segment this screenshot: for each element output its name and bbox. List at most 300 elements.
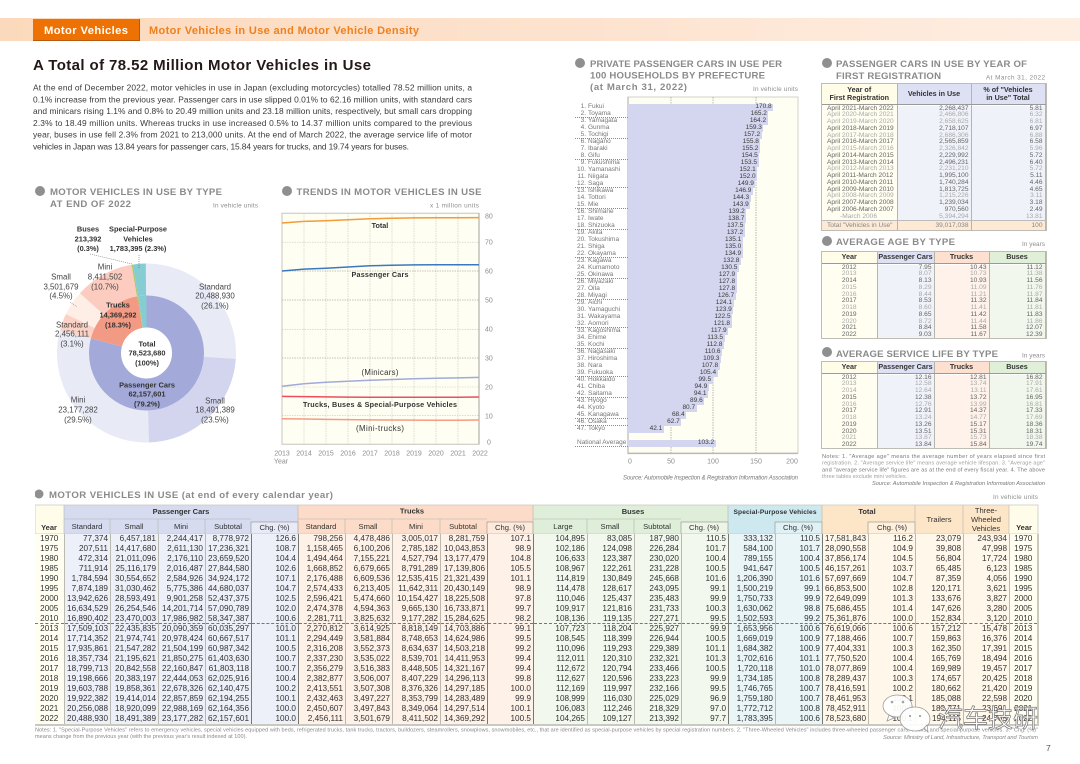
bar chart: prefectures: 127.9 (719, 271, 735, 278)
table: first registration: April 2010-March 2011 (827, 179, 893, 186)
bar chart: prefectures: 24. (577, 264, 586, 271)
table: average service life: 2020 (842, 428, 857, 435)
table body: yearly data: 19,858,361 (115, 684, 156, 693)
table body: yearly data: 226,944 (649, 634, 679, 643)
bar chart: prefectures: 45. (577, 411, 586, 418)
heading: first registration: PASSENGER CARS IN USE BY YEAR OF (836, 59, 1027, 70)
table body: yearly data: 6,123 (986, 564, 1007, 573)
panel: average age by type (821, 236, 1047, 339)
line chart (274, 213, 493, 466)
table: average age: 2015 (842, 284, 857, 291)
table body: yearly data: 2022 (40, 714, 58, 723)
table body: yearly data: 213,392 (649, 714, 679, 723)
table body: yearly data: 57,090,789 (208, 604, 249, 613)
table body: yearly data: 83,085 (607, 534, 632, 543)
table body: yearly data: 100.3 (892, 644, 913, 653)
intro paragraph: 0.1% increase from the previous year. Passenger cars in use slipped 0.01% to 62.16 million units, with standard cars (33, 94, 472, 104)
table body: yearly data: 60,987,342 (208, 644, 249, 653)
table body: yearly data: 99.2 (515, 644, 531, 653)
bar chart: prefectures: Ehime (588, 334, 606, 341)
table body: yearly data: 2019 (40, 684, 58, 693)
table body: yearly data: 14,201,714 (162, 604, 203, 613)
table body: yearly data: 3,827 (986, 594, 1007, 603)
bar chart: prefectures: Osaka (588, 418, 607, 425)
table body: yearly data: 128,617 (602, 584, 632, 593)
table body: yearly data: 98.9 (515, 584, 531, 593)
table header: Buses (622, 507, 644, 516)
table body: yearly data: 2010 (40, 614, 58, 623)
table body: yearly data: 14,283,489 (444, 694, 485, 703)
table: average service life: 12.16 (915, 374, 932, 381)
unit note: In years (1022, 352, 1045, 360)
x axis: 2020 (428, 450, 444, 458)
table body: yearly data: 2018 (1014, 674, 1032, 683)
notes: and "average service life" figures are as at the end of every fiscal year. 4. The above (822, 468, 1045, 474)
bar chart: prefectures: 34. (577, 334, 586, 341)
bar chart: prefectures: 28. (577, 292, 586, 299)
table body: yearly data: 235,483 (649, 594, 679, 603)
table: average service life: Trucks (950, 362, 973, 371)
table body: yearly data: 116,030 (603, 694, 632, 703)
heading: first registration (822, 58, 1027, 82)
x axis (628, 458, 798, 466)
table body: yearly data: 110,096 (556, 644, 585, 653)
table body: yearly data: 2016 (1014, 654, 1032, 663)
table body: yearly data: 14,297,514 (444, 704, 485, 713)
donut labels: (26.1%) (201, 302, 229, 310)
table: first registration: April 2008-March 2009 (827, 192, 894, 199)
panel: private passenger cars per 100 households (575, 58, 799, 482)
table body: yearly data: 100.5 (706, 564, 726, 573)
table body: yearly data: 20,978,424 (162, 634, 203, 643)
table: average age: Passenger Cars (878, 252, 933, 261)
donut labels: (10.7%) (91, 282, 119, 292)
table body: yearly data: 19,603,788 (67, 684, 108, 693)
table body: yearly data: 100.7 (800, 694, 820, 703)
table: average age: 11.32 (970, 297, 986, 304)
table body: yearly data: 102.0 (276, 604, 296, 613)
table header: Subtotal (214, 522, 242, 531)
donut labels: Standard (199, 282, 231, 292)
donut labels: Mini (98, 262, 112, 272)
table body: yearly data: 8,411,502 (402, 714, 438, 723)
table body: yearly data: 2000 (40, 594, 58, 603)
bar chart: prefectures: 149.9 (738, 180, 754, 187)
table header: Subtotal (643, 522, 671, 531)
bar chart: prefectures: Fukuoka (588, 369, 613, 376)
table: first registration: 6.40 (1030, 159, 1042, 166)
bar chart: prefectures: Shiga (588, 243, 605, 250)
table body: yearly data: 2,574,433 (307, 584, 343, 593)
x axis: 0 (628, 458, 632, 466)
series labels: Passenger Cars (352, 270, 408, 279)
table body: yearly data: 1,494,464 (307, 554, 343, 563)
bar chart: prefectures: Hyogo (588, 397, 607, 404)
table header: Standard (306, 522, 336, 531)
table body: yearly data: 207,511 (79, 544, 108, 553)
table body: yearly data: 99.9 (515, 694, 531, 703)
table body: yearly data: 2021 (1014, 704, 1032, 713)
bar chart: prefectures: 113.5 (707, 334, 723, 341)
table body: yearly data: 34,924,172 (208, 574, 249, 583)
x axis: 50 (667, 458, 675, 466)
table: first registration: 6.81 (1030, 118, 1042, 125)
bar chart: prefectures: 152.0 (739, 173, 756, 180)
table: average age: 2021 (842, 324, 857, 331)
table body: yearly data: 7,874,189 (72, 584, 108, 593)
table body: yearly data: 1995 (40, 584, 58, 593)
bar chart: prefectures: Kagawa (588, 257, 612, 264)
table: average age: Buses (1006, 252, 1028, 261)
table: average age: 10.93 (970, 277, 986, 284)
table body: yearly data: 16,890,402 (67, 614, 108, 623)
bar chart: prefectures: 138.7 (728, 215, 744, 222)
panel: passenger cars by year of first registration (821, 58, 1047, 231)
x axis: 2015 (318, 450, 334, 458)
table body: yearly data: 100.0 (276, 714, 296, 723)
series: total (282, 218, 479, 223)
table: average age: 11.84 (1026, 297, 1042, 304)
table body: yearly data: 1,772,712 (737, 704, 773, 713)
bar chart: prefectures: 43. (577, 397, 586, 404)
table: first registration (821, 83, 1047, 231)
table body: yearly data: 112,672 (556, 664, 585, 673)
table body: yearly data: 22,678,326 (162, 684, 203, 693)
table header: Total (858, 507, 876, 516)
table body: yearly data: 100.2 (892, 684, 913, 693)
table: average age: 2022 (842, 331, 857, 338)
table: average age: 8.65 (919, 311, 932, 318)
heading: per 100 households: PRIVATE PASSENGER CARS IN USE PER (590, 59, 782, 70)
table: average service life: 2021 (842, 434, 857, 441)
table body: yearly data: 2022 (1014, 714, 1032, 723)
table body: yearly data: 243,934 (977, 534, 1007, 543)
x axis: 2017 (362, 450, 378, 458)
table: average service life: Buses (1006, 362, 1028, 371)
table: first registration: April 2013-March 2014 (827, 159, 894, 166)
heading: service life: AVERAGE SERVICE LIFE BY TYPE (836, 349, 999, 360)
bar chart: prefectures: 6. (581, 138, 586, 145)
table: average service life: 2012 (842, 374, 857, 381)
table body: yearly data: 98.8 (804, 604, 820, 613)
bar chart: prefectures: 21. (577, 243, 586, 250)
table body: yearly data: 75,686,455 (825, 604, 866, 613)
table body: yearly data: 17,581,843 (825, 534, 866, 543)
table body: yearly data: 99.9 (804, 594, 820, 603)
table: first registration: 2,718,107 (939, 125, 968, 132)
table: first registration: April 2015-March 2016 (827, 145, 894, 152)
inner ring (105, 312, 188, 394)
table body: yearly data: 225,927 (649, 624, 679, 633)
donut labels: 18,491,389 (195, 406, 235, 414)
table header: Subtotal (449, 522, 477, 531)
series: trucks, buses and special-purpose (282, 395, 479, 398)
bar chart: prefectures: 47. (577, 425, 586, 432)
bar chart: prefectures: Kanagawa (588, 411, 619, 418)
table body: yearly data: 101.3 (892, 594, 913, 603)
table: average service life: 13.72 (970, 394, 986, 401)
table: average service life: 13.84 (915, 441, 932, 448)
table: average age: 11.86 (1026, 318, 1042, 325)
heading: trends: TRENDS IN MOTOR VEHICLES IN USE (296, 187, 482, 198)
table body: yearly data: 100.7 (276, 654, 296, 663)
table body: yearly data: 77,404,331 (825, 644, 866, 653)
table body: yearly data: 1,158,465 (307, 544, 343, 553)
table header: Chg. (%) (783, 523, 813, 532)
table body: yearly data: 25,116,179 (116, 564, 156, 573)
table header: Chg. (%) (877, 523, 907, 532)
series labels (303, 221, 457, 433)
bar chart: prefectures: Gunma (588, 124, 609, 131)
series labels: Total (372, 221, 388, 230)
bar chart: prefectures: 10. (577, 166, 586, 173)
table body: yearly data: 126.6 (276, 534, 296, 543)
y axis: 30 (485, 356, 493, 362)
table body: yearly data: 108,999 (555, 694, 585, 703)
table body: yearly data: 28,593,491 (115, 594, 156, 603)
table body: yearly data: 11,642,311 (398, 584, 438, 593)
table body: yearly data: 104.5 (892, 554, 913, 563)
table body: yearly data: 22,435,835 (115, 624, 156, 633)
bar chart: prefectures: 27. (577, 285, 586, 292)
unit note: In vehicle units (753, 86, 798, 93)
table: average service life: 17.91 (1026, 380, 1042, 387)
table: average age: 2018 (842, 304, 857, 311)
table body: yearly data: 14,417,680 (115, 544, 156, 553)
table body: yearly data: 2,270,812 (307, 624, 343, 633)
table: average age: 11.12 (1026, 264, 1042, 271)
bar chart: prefectures: 16. (577, 208, 586, 215)
table: first registration: April 2021-March 2022 (827, 105, 894, 112)
bar chart: prefectures: 12. (577, 180, 586, 187)
table body: yearly data: 78,289,437 (825, 674, 866, 683)
table body: yearly data: 5,775,386 (167, 584, 203, 593)
table header: Special-Purpose Vehicles (734, 509, 817, 516)
unit note: In vehicle units (993, 494, 1038, 501)
bar chart: prefectures: 15. (577, 201, 586, 208)
table body: yearly data: 6,457,181 (120, 534, 156, 543)
intro paragraph: 2.3% to 18.49 million units. Whereas trucks in use increased 0.5% to 14.37 million units compared to the previous (33, 118, 472, 128)
bar chart: prefectures: 154.5 (742, 152, 758, 159)
notes: three tables exclude mini vehicles. (822, 474, 908, 480)
bar chart: prefectures: Kyoto (588, 404, 605, 411)
table body: yearly data: 941,647 (743, 564, 773, 573)
table: average service life: 13.99 (970, 401, 986, 408)
watermark (882, 694, 1038, 733)
bar chart: prefectures: 13. (577, 187, 586, 194)
bar chart: prefectures: 105.4 (700, 369, 716, 376)
table body: yearly data: 20,256,088 (67, 704, 108, 713)
bar chart: prefectures: 38. (577, 362, 586, 369)
table header: Year (41, 523, 57, 532)
table body: yearly data: 333,132 (743, 534, 773, 543)
table body: yearly data: 1985 (1014, 564, 1032, 573)
table body: yearly data: 2,456,111 (308, 714, 343, 723)
table body: yearly data: 1,750,733 (737, 594, 773, 603)
table body: yearly data: 1,653,956 (737, 624, 773, 633)
bar chart: prefectures: Shimane (588, 208, 614, 215)
table header: Mini (174, 522, 188, 531)
table body: yearly data: 2005 (40, 604, 58, 613)
table body: yearly data: 106,083 (555, 704, 585, 713)
table body: yearly data: 7,155,221 (354, 554, 390, 563)
table body: yearly data: 18,225,508 (444, 594, 485, 603)
table body: yearly data: 62,025,916 (208, 674, 249, 683)
table body: yearly data: 21,974,741 (115, 634, 156, 643)
table: average age: 11.76 (1026, 284, 1042, 291)
bar chart: prefectures: 17. (577, 215, 586, 222)
table body: yearly data: 2,432,463 (307, 694, 343, 703)
table body: yearly data: 1975 (40, 544, 58, 553)
table body: yearly data: 2,382,877 (307, 674, 343, 683)
table body: yearly data: 4,594,363 (354, 604, 390, 613)
bar chart: prefectures: 122.5 (714, 313, 731, 320)
icon: chat bubbles (883, 695, 930, 732)
table body: yearly data: 100.2 (276, 684, 296, 693)
table body: yearly data: 26,254,546 (115, 604, 156, 613)
bar chart: prefectures: 31. (577, 313, 586, 320)
table body: yearly data: 2,294,449 (307, 634, 343, 643)
y axis: 20 (485, 384, 493, 392)
donut labels: 20,488,930 (195, 292, 235, 300)
table body: yearly data: 110,046 (556, 594, 585, 603)
heading: by type: AT END OF 2022 (50, 199, 131, 210)
table body: yearly data: 21,504,199 (162, 644, 203, 653)
unit note: In years (1022, 241, 1045, 248)
table body: yearly data: 119,997 (603, 684, 632, 693)
table body: yearly data: 147,626 (931, 604, 961, 613)
table body: yearly data: 100.4 (706, 554, 726, 563)
table body: yearly data: 101.6 (706, 574, 726, 583)
y axis: 50 (485, 298, 493, 304)
table: average service life: Year (842, 362, 857, 371)
table body: yearly data: 189,771 (931, 704, 961, 713)
bar chart: prefectures: 41. (577, 383, 586, 390)
x axis: 2018 (384, 450, 400, 458)
table body: yearly data: 1,720,118 (737, 664, 773, 673)
bar chart: prefectures: 89.6 (690, 397, 703, 404)
bar chart: prefectures: 39. (577, 369, 586, 376)
x axis: 2019 (406, 450, 422, 458)
notes (35, 728, 1038, 740)
bar chart: prefectures: 25. (577, 271, 586, 278)
donut labels: Vehicles (123, 234, 153, 244)
table body: yearly data: 22,857,859 (162, 694, 203, 703)
outer ring (73, 280, 220, 426)
donut labels (43, 224, 235, 424)
bar plot background (628, 97, 798, 454)
table body: yearly data: 17,724 (982, 554, 1007, 563)
table: first registration: 970,560 (945, 206, 968, 213)
table body: yearly data: 798,256 (313, 534, 343, 543)
table body: yearly data: 101.7 (800, 544, 820, 553)
table body: yearly data: 230,020 (649, 554, 679, 563)
table: first registration: 5.72 (1030, 165, 1042, 172)
table body: yearly data: 20,842,558 (115, 664, 156, 673)
series labels: (Mini-trucks) (356, 424, 404, 433)
table: first registration: 2,268,437 (939, 105, 968, 112)
table: average service life: 15.73 (970, 434, 986, 441)
bar chart: prefectures: 132.8 (723, 257, 739, 264)
section title: Motor Vehicles in Use and Motor Vehicle Density (149, 25, 420, 37)
table: average service life: 13.87 (915, 434, 932, 441)
table body: yearly data: 789,155 (743, 554, 773, 563)
table body: yearly data: 13,942,626 (67, 594, 108, 603)
table: first registration: 13.81 (1026, 213, 1042, 220)
heading: by type: MOTOR VEHICLES IN USE BY TYPE (50, 187, 223, 198)
table body: yearly data: 180,662 (931, 684, 961, 693)
table header: Small (600, 522, 620, 531)
main heading: A Total of 78.52 Million Motor Vehicles in Use (33, 57, 371, 74)
table body: yearly data: 3,552,373 (354, 644, 390, 653)
section tab: Motor Vehicles (44, 25, 128, 37)
table: first registration: 4.65 (1030, 186, 1042, 193)
table body: yearly data: 39,808 (936, 544, 961, 553)
table body: yearly data: 233,223 (649, 674, 679, 683)
bar chart: prefectures: 1. (581, 103, 586, 110)
x axis: 200 (786, 458, 798, 466)
table body: yearly data: 112,169 (556, 684, 585, 693)
table body: yearly data: 3,280 (986, 604, 1007, 613)
table: average age: 2012 (842, 264, 857, 271)
table body: yearly data: 61,403,630 (208, 654, 249, 663)
intro paragraph (33, 82, 472, 151)
bar chart: prefectures: 124.1 (716, 299, 732, 306)
intro paragraph: and minicars rising 1.1% and 0.8% to 20.49 million units and 23.18 million units, respectively, but small cars dropping (33, 106, 472, 116)
source: Source: Ministry of Land, Infrastructure, Transport and Tourism (883, 735, 1038, 741)
table: average age: Trucks (950, 252, 973, 261)
table: average age: 11.87 (1026, 291, 1042, 298)
table: first registration: 6.97 (1030, 125, 1042, 132)
bar chart: prefectures: 20. (577, 236, 586, 243)
bar chart: prefectures: Kochi (588, 341, 604, 348)
table header: Wheeled (971, 515, 1001, 524)
table body: yearly data: 100.6 (800, 714, 820, 723)
table body: yearly data: 1980 (1014, 554, 1032, 563)
table: average service life: 2017 (842, 407, 857, 414)
table body: yearly data: 100.6 (892, 624, 913, 633)
table body: yearly data: 101.1 (800, 654, 820, 663)
table body: yearly data: 124,098 (602, 544, 632, 553)
table body: yearly data: 711,914 (79, 564, 108, 573)
table body: yearly data: 233,466 (649, 664, 679, 673)
table body: yearly data: 120,794 (602, 664, 632, 673)
bar chart: prefectures: 137.5 (727, 222, 743, 229)
table body: yearly data: 62,164,356 (208, 704, 249, 713)
table: average age (821, 251, 1047, 339)
table: average age: 2013 (842, 270, 857, 277)
table body: yearly data: 2005 (1014, 604, 1032, 613)
notes (822, 454, 1045, 487)
table header: Small (358, 522, 378, 531)
bar chart: prefectures: 146.9 (735, 187, 751, 194)
table: average service life: 12.91 (915, 407, 932, 414)
table: average service life: 12.64 (915, 387, 932, 394)
bar chart: prefectures: 144.3 (733, 194, 749, 201)
table body: yearly data: 2,176,110 (167, 554, 203, 563)
table body: yearly data: 66,853,500 (825, 584, 866, 593)
table body: yearly data: 108,967 (555, 564, 585, 573)
table body: yearly data: 3,535,022 (354, 654, 390, 663)
table body: yearly data: 3,516,383 (354, 664, 390, 673)
donut labels: Special-Purpose (109, 224, 167, 234)
table body: yearly data: 99.1 (710, 584, 726, 593)
bar chart: prefectures: 23. (577, 257, 586, 264)
table: first registration: 6.58 (1030, 138, 1042, 145)
table body: yearly data: 2000 (1014, 594, 1032, 603)
table header: Chg. (%) (689, 523, 719, 532)
table body: yearly data: 101.7 (706, 544, 726, 553)
